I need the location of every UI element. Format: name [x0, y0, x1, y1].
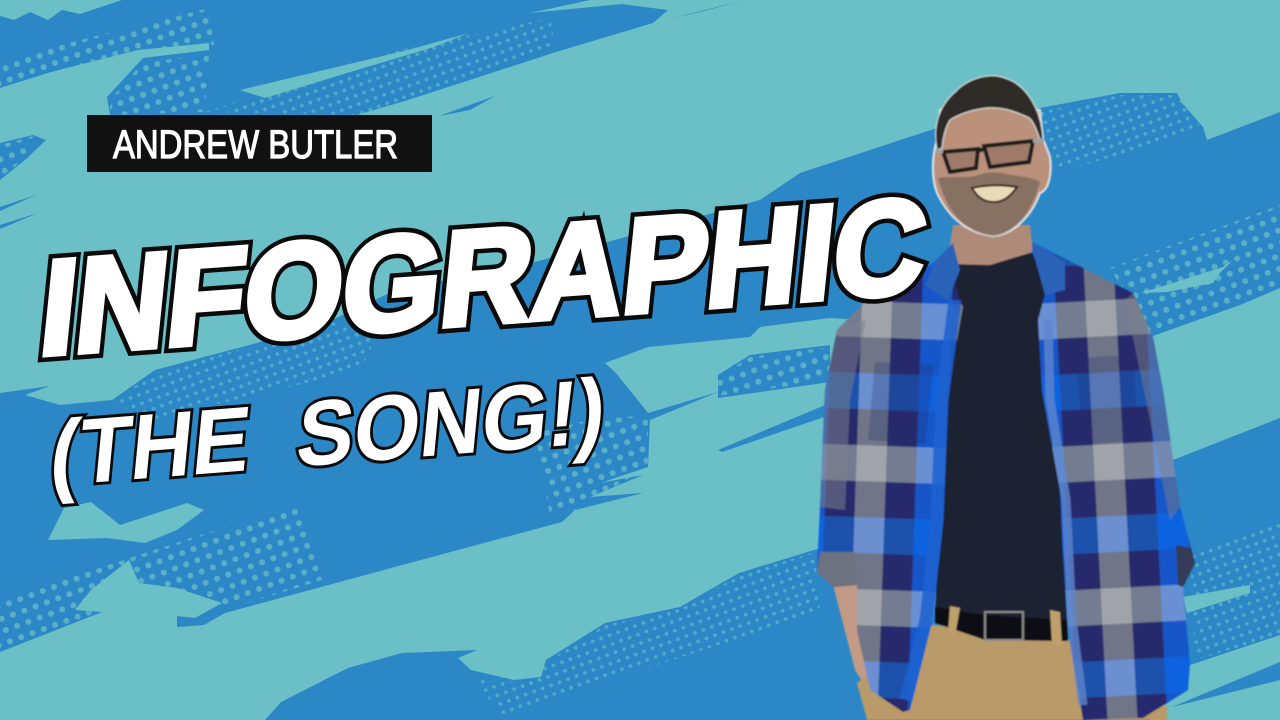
shirt right: [1032, 242, 1195, 720]
belt loops: [948, 606, 1062, 645]
collars: [925, 243, 960, 300]
beard stubble: [938, 172, 1040, 236]
sleeve shading: [820, 320, 866, 510]
name label: [87, 115, 432, 172]
title: INFOGRAPHIC: [34, 169, 933, 384]
hand: [833, 583, 868, 690]
pants: [857, 625, 1167, 720]
glasses: [936, 140, 1044, 172]
hair: [936, 76, 1043, 150]
smile: [972, 185, 1017, 202]
person photo: [817, 76, 1195, 720]
head: [933, 100, 1051, 236]
shirt pockets: [868, 362, 934, 444]
belt: [935, 607, 1068, 641]
dark t-shirt: [935, 250, 1068, 640]
teal streaks: [48, 33, 1250, 613]
title: INFOGRAPHIC: [34, 169, 933, 384]
name label: ANDREW BUTLER: [113, 123, 398, 167]
subtitle: (THE SONG!): [46, 358, 610, 506]
cuffs: [817, 552, 857, 587]
neck: [947, 225, 1033, 265]
placket strips: [906, 300, 955, 700]
shirt left: [817, 243, 963, 712]
